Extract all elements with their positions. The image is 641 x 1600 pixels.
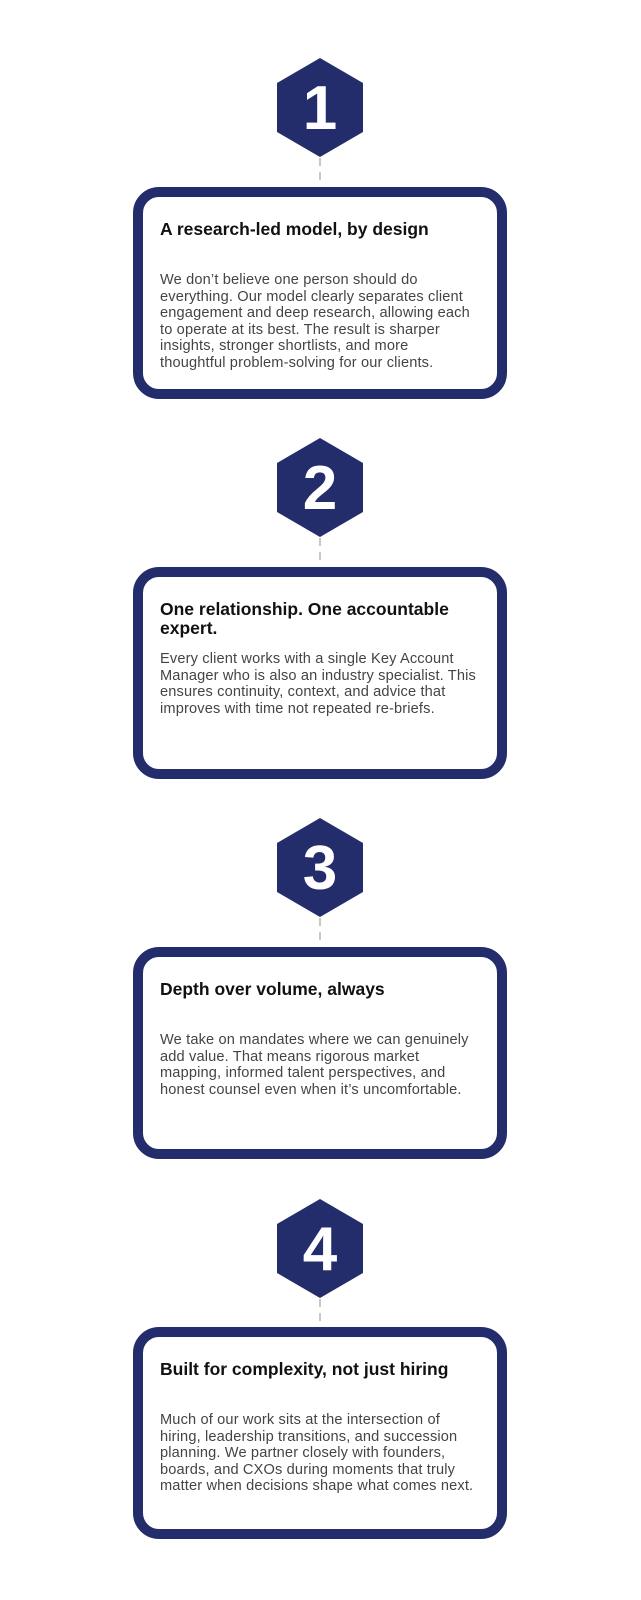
card 2: expert. (160, 618, 217, 638)
hexagon 1: 1 (303, 74, 337, 143)
card 1: everything. Our model clearly separates client (160, 289, 463, 305)
hexagon 2 (277, 438, 363, 537)
card 2: ensures continuity, context, and advice that (160, 684, 445, 700)
card 2: improves with time not repeated re-briefs. (160, 701, 435, 717)
card 4: Built for complexity, not just hiring (160, 1359, 448, 1379)
card 2: Every client works with a single Key Account (160, 651, 454, 667)
card 1: We don’t believe one person should do (160, 272, 418, 288)
hexagon 3 (277, 818, 363, 917)
card 1 (133, 187, 507, 399)
hexagon 2: 2 (303, 454, 337, 523)
card 2: One relationship. One accountable (160, 599, 449, 619)
card 1: A research-led model, by design (160, 219, 429, 239)
card 1: insights, stronger shortlists, and more (160, 338, 408, 354)
card 1: to operate at its best. The result is sharper (160, 322, 440, 338)
card 2 (133, 567, 507, 779)
card 4: matter when decisions shape what comes next. (160, 1478, 473, 1494)
card 3: mapping, informed talent perspectives, and (160, 1065, 445, 1081)
card 4 (133, 1327, 507, 1539)
card 4: hiring, leadership transitions, and succession (160, 1429, 457, 1445)
hexagon 1 (277, 58, 363, 157)
card 2: Manager who is also an industry specialist. This (160, 668, 476, 684)
card 3: add value. That means rigorous market (160, 1049, 419, 1065)
card 3: We take on mandates where we can genuinely (160, 1032, 469, 1048)
hexagon 4 (277, 1199, 363, 1298)
card 3: honest counsel even when it’s uncomfortable. (160, 1082, 462, 1098)
hexagon 4: 4 (303, 1215, 338, 1284)
card 1: engagement and deep research, allowing each (160, 305, 470, 321)
card 4: planning. We partner closely with founders, (160, 1445, 445, 1461)
card 1: thoughtful problem-solving for our clients. (160, 355, 433, 371)
card 3 (133, 947, 507, 1159)
hexagon 3: 3 (303, 834, 337, 903)
card 3: Depth over volume, always (160, 979, 385, 999)
card 4: Much of our work sits at the intersection of (160, 1412, 440, 1428)
card 4: boards, and CXOs during moments that truly (160, 1462, 455, 1478)
